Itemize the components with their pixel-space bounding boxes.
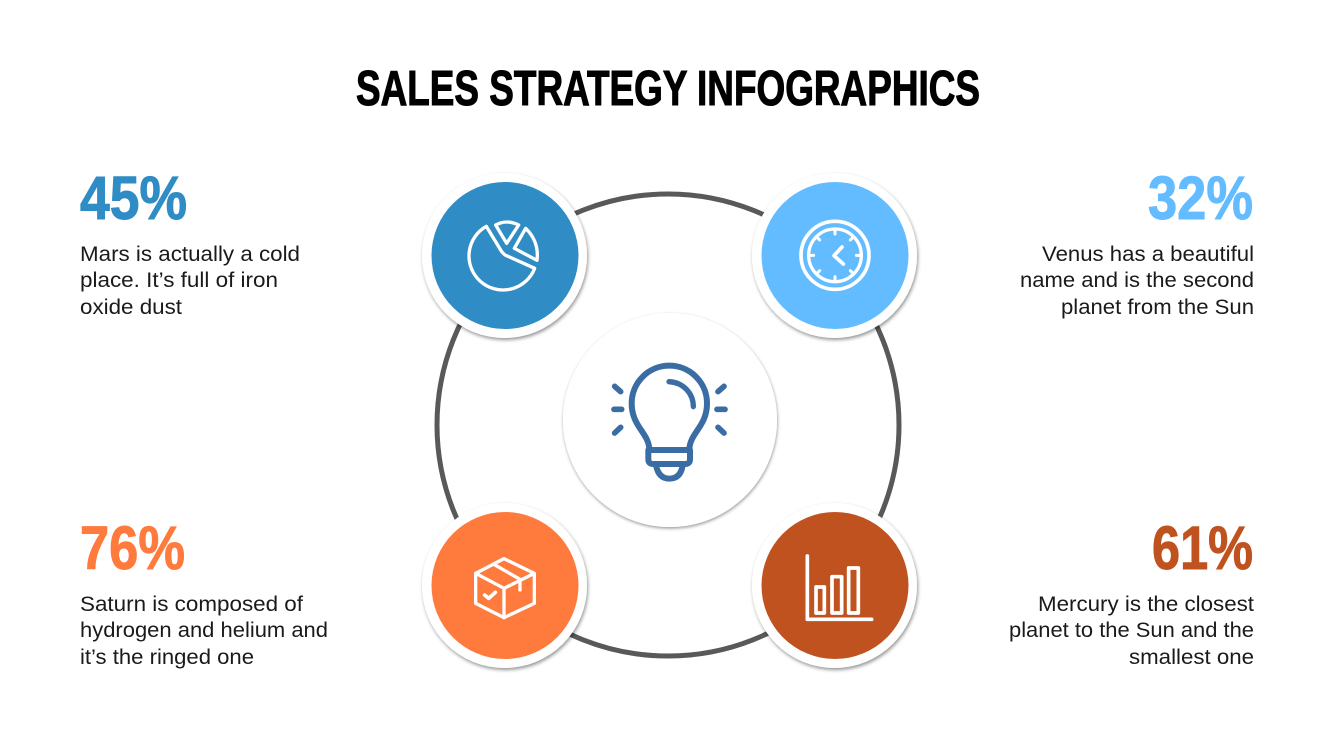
icon: lightbulb <box>614 366 725 479</box>
icon: bar chart <box>807 556 872 619</box>
icon: pie chart <box>469 222 537 290</box>
icon: clock <box>801 221 869 289</box>
stat block: 32% Venus <box>1020 164 1254 319</box>
description: Venus <box>1020 243 1254 319</box>
centre circle with lightbulb <box>563 313 777 527</box>
node: package box (orange) <box>422 503 587 668</box>
icon: package box <box>476 559 534 618</box>
description: Mars: Mars is actually a cold <box>80 243 300 266</box>
node: clock (light blue) <box>752 173 917 338</box>
description: Saturn <box>80 593 328 669</box>
description: Venus: name and is the second <box>1020 269 1254 292</box>
description: Venus: Venus has a beautiful <box>1042 243 1254 266</box>
description: Mercury: smallest one <box>1129 646 1254 669</box>
node: pie chart (blue) <box>422 173 587 338</box>
percentage: 76%: 76% <box>80 514 185 582</box>
description: Mars: oxide dust <box>80 296 182 319</box>
description: Saturn: Saturn is composed of <box>80 593 303 616</box>
description: Saturn: it’s the ringed one <box>80 646 254 669</box>
description: Mercury: Mercury is the closest <box>1038 593 1254 616</box>
stat block: 76% Saturn <box>80 514 328 669</box>
percentage: 45%: 45% <box>80 164 187 232</box>
stat block: 45% Mars <box>80 164 300 319</box>
stat block: 61% Mercury <box>1009 514 1254 669</box>
central ring <box>437 194 899 656</box>
description: Venus: planet from the Sun <box>1061 296 1254 319</box>
percentage: 61%: 61% <box>1152 514 1253 582</box>
percentage: 32%: 32% <box>1148 164 1253 232</box>
node: bar chart (rust) <box>752 503 917 668</box>
description: Mars: place. It’s full of iron <box>80 269 278 292</box>
description: Mercury: planet to the Sun and the <box>1009 619 1254 642</box>
description: Mercury <box>1009 593 1254 669</box>
description: Saturn: hydrogen and helium and <box>80 619 328 642</box>
title: SALES STRATEGY INFOGRAPHICS <box>356 62 980 116</box>
description: Mars <box>80 243 300 319</box>
